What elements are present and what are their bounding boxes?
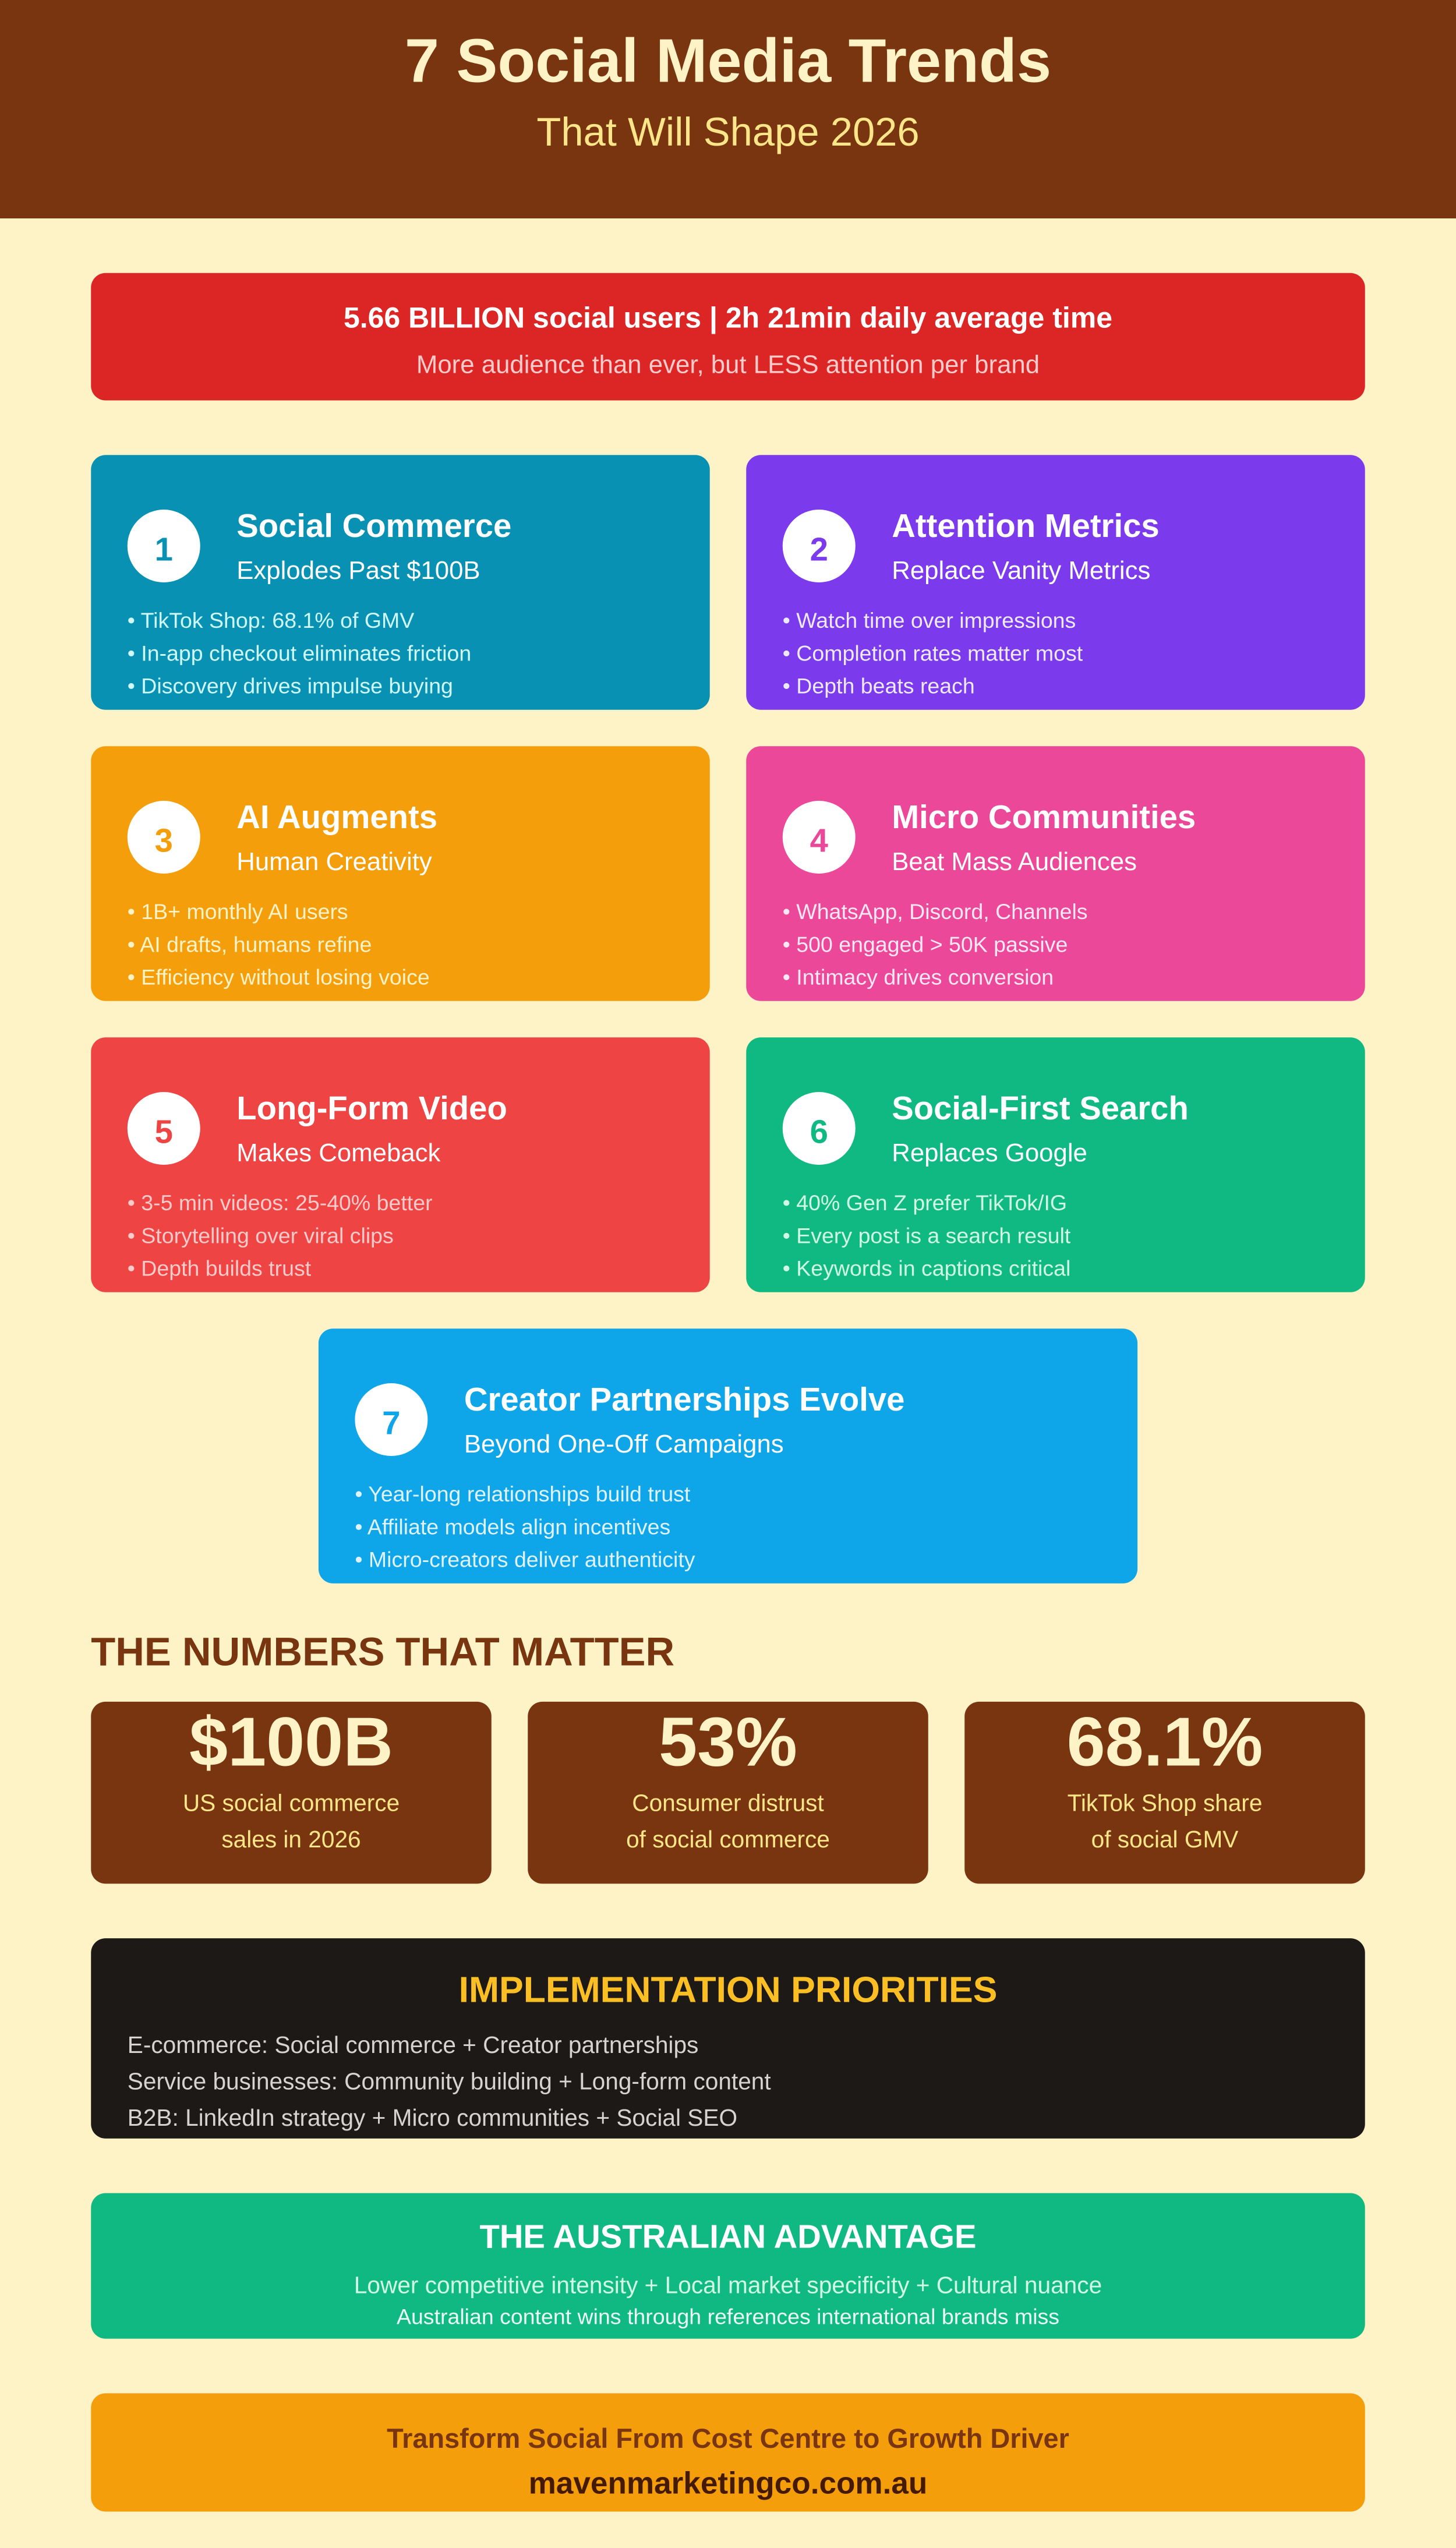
panel: the Australian advantage (91, 2193, 1365, 2339)
trend 4 bullets (783, 899, 1088, 989)
stat label: of social GMV (1091, 1826, 1238, 1853)
stat label (626, 1789, 830, 1853)
advantage line 2: Australian content wins through references international brands miss (397, 2305, 1059, 2329)
number badge 4 (783, 801, 856, 874)
stat label: of social commerce (626, 1826, 830, 1853)
number badge 3 (128, 801, 200, 874)
number badge 7 (355, 1383, 427, 1456)
number badge 2: 2 (810, 531, 828, 567)
trend 2 bullets: • Depth beats reach (783, 674, 975, 698)
stat card: 68.1% (964, 1702, 1365, 1883)
implementation list: E-commerce: Social commerce + Creator partnerships (128, 2031, 698, 2058)
call to action headline: Transform Social From Cost Centre to Growth Driver (387, 2423, 1069, 2454)
trend 2 bullets (783, 608, 1083, 698)
trend 6 bullets: • Keywords in captions critical (783, 1256, 1070, 1281)
panel: trend 6 social-first search (746, 1037, 1365, 1292)
advantage line 1: Lower competitive intensity + Local market specificity + Cultural nuance (354, 2271, 1102, 2298)
stat label (1068, 1789, 1262, 1853)
number badge 1: 1 (155, 531, 173, 567)
number badge 2 (783, 510, 856, 582)
trend 6 heading: Social-First Search (892, 1090, 1189, 1126)
panel: audience stat banner (91, 273, 1365, 401)
trend 7 subheading: Beyond One-Off Campaigns (464, 1430, 784, 1458)
stat value: 53% (659, 1703, 797, 1780)
trend 6 bullets: • Every post is a search result (783, 1223, 1071, 1248)
stat label: TikTok Shop share (1068, 1789, 1262, 1816)
trend 5 heading: Long-Form Video (236, 1090, 507, 1126)
trend 4 bullets: • Intimacy drives conversion (783, 965, 1054, 989)
stat value: 68.1% (1067, 1703, 1263, 1780)
trend 6 subheading: Replaces Google (892, 1139, 1087, 1167)
trend 4 subheading: Beat Mass Audiences (892, 847, 1137, 876)
trend 5 bullets: • Storytelling over viral clips (128, 1223, 394, 1248)
panel: implementation priorities (91, 1938, 1365, 2139)
number badge 7: 7 (382, 1404, 401, 1441)
trend 7 bullets: • Affiliate models align incentives (355, 1514, 670, 1539)
title: 7 Social Media Trends (405, 26, 1051, 96)
trend 1 bullets (128, 608, 471, 698)
trend 5 subheading: Makes Comeback (236, 1139, 441, 1167)
trend 2 bullets: • Watch time over impressions (783, 608, 1076, 632)
website address: mavenmarketingco.com.au (529, 2466, 927, 2500)
panel: trend 1 social commerce (91, 455, 710, 710)
stat label (183, 1789, 400, 1853)
panel: trend 4 micro communities (746, 746, 1365, 1001)
trend 1 bullets: • In-app checkout eliminates friction (128, 641, 471, 665)
number badge 6: 6 (810, 1113, 828, 1150)
stat label: US social commerce (183, 1789, 400, 1816)
trend 4 bullets: • 500 engaged > 50K passive (783, 932, 1068, 956)
trend 6 bullets (783, 1190, 1071, 1281)
trend 3 bullets (128, 899, 430, 989)
trend 5 bullets: • 3-5 min videos: 25-40% better (128, 1190, 433, 1215)
panel: trend 2 attention metrics (746, 455, 1365, 710)
number badge 1 (128, 510, 200, 582)
implementation list: Service businesses: Community building + Long-form content (128, 2068, 771, 2095)
trend 3 subheading: Human Creativity (236, 847, 432, 876)
number badge 6 (783, 1092, 856, 1165)
trend 2 subheading: Replace Vanity Metrics (892, 556, 1150, 585)
number badge 5 (128, 1092, 200, 1165)
trend 7 bullets: • Micro-creators deliver authenticity (355, 1547, 695, 1572)
trend 4 heading: Micro Communities (892, 798, 1196, 835)
trend 5 bullets (128, 1190, 433, 1281)
trend 3 bullets: • AI drafts, humans refine (128, 932, 372, 956)
trend 2 heading: Attention Metrics (892, 507, 1160, 544)
banner headline: 5.66 BILLION social users | 2h 21min daily average time (344, 301, 1112, 334)
trend 1 heading: Social Commerce (236, 507, 511, 544)
trend 5 bullets: • Depth builds trust (128, 1256, 312, 1281)
trend 1 subheading: Explodes Past $100B (236, 556, 480, 585)
number badge 3: 3 (155, 822, 173, 858)
stat label: sales in 2026 (221, 1826, 361, 1853)
trend 3 bullets: • 1B+ monthly AI users (128, 899, 348, 924)
banner subline: More audience than ever, but LESS attention per brand (416, 351, 1040, 379)
number badge 5: 5 (155, 1113, 173, 1150)
trend 6 bullets: • 40% Gen Z prefer TikTok/IG (783, 1190, 1067, 1215)
trend 2 bullets: • Completion rates matter most (783, 641, 1083, 665)
subtitle: That Will Shape 2026 (536, 109, 920, 154)
trend 7 heading: Creator Partnerships Evolve (464, 1381, 904, 1418)
implementation list (128, 2031, 771, 2131)
stat value: $100B (189, 1703, 393, 1780)
panel: trend 5 long-form video (91, 1037, 710, 1292)
implementation heading: IMPLEMENTATION PRIORITIES (459, 1969, 997, 2010)
stat card: 53% (528, 1702, 928, 1883)
panel: trend 7 creator partnerships (319, 1328, 1137, 1584)
implementation list: B2B: LinkedIn strategy + Micro communities + Social SEO (128, 2104, 737, 2131)
trend 7 bullets (355, 1482, 695, 1572)
trend 3 heading: AI Augments (236, 798, 437, 835)
trend 7 bullets: • Year-long relationships build trust (355, 1482, 691, 1506)
stat card: $100B (91, 1702, 492, 1883)
panel: call to action (91, 2393, 1365, 2511)
section heading: the numbers that matter: THE NUMBERS THAT MATTER (91, 1629, 674, 1674)
trend 3 bullets: • Efficiency without losing voice (128, 965, 430, 989)
trend 1 bullets: • TikTok Shop: 68.1% of GMV (128, 608, 414, 632)
panel: trend 3 AI augments (91, 746, 710, 1001)
advantage heading: THE AUSTRALIAN ADVANTAGE (479, 2218, 977, 2254)
number badge 4: 4 (810, 822, 828, 858)
trend 4 bullets: • WhatsApp, Discord, Channels (783, 899, 1088, 924)
stat label: Consumer distrust (632, 1789, 824, 1816)
header band (0, 0, 1456, 218)
trend 1 bullets: • Discovery drives impulse buying (128, 674, 453, 698)
